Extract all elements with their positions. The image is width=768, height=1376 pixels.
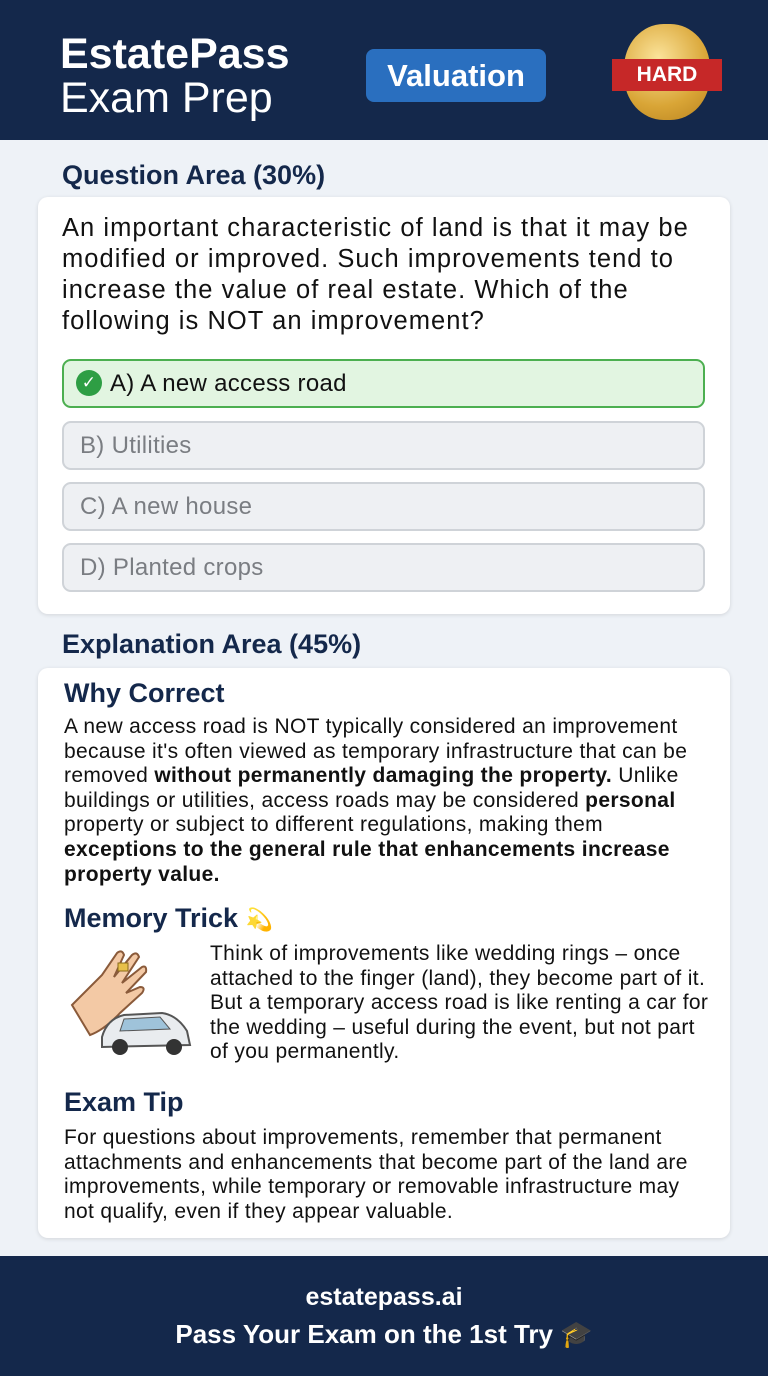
question card	[38, 197, 730, 614]
exam tip text: For questions about improvements, remember that permanent attachments and enhancements that become part of the land are improvements, while temporary or removable infrastructure may not qualify, even if they appear valuable.	[64, 1126, 688, 1223]
title: Exam Prep	[60, 74, 273, 122]
option D: D) Planted crops	[80, 554, 264, 581]
difficulty badge	[612, 24, 722, 120]
option D	[62, 543, 705, 592]
explanation heading: Explanation Area (45%)	[62, 629, 361, 659]
icon: hand and car	[70, 950, 192, 1055]
why correct heading: Why Correct	[64, 678, 225, 708]
option B: B) Utilities	[80, 432, 192, 459]
option A correct: A) A new access road	[110, 370, 347, 397]
option C	[62, 482, 705, 531]
memory trick heading: Memory Trick 💫	[64, 903, 273, 933]
header	[0, 0, 768, 140]
option A correct: ✓	[82, 373, 96, 392]
difficulty badge: HARD	[637, 63, 697, 86]
option C: C) A new house	[80, 493, 252, 520]
exam tip heading: Exam Tip	[64, 1087, 184, 1117]
footer	[0, 1256, 768, 1376]
footer tagline: Pass Your Exam on the 1st Try 🎓	[175, 1319, 593, 1349]
category badge	[366, 49, 546, 102]
option B	[62, 421, 705, 470]
why correct text: A new access road is NOT typically considered an improvement because it's often viewed as temporary infrastructure that can be removed without permanently damaging the property. Unlike buildings or utilities, access roads may be considered personal property or subject to different regulations, making them exceptions to the general rule that enhancements increase property value.	[64, 715, 687, 886]
title: EstatePass	[60, 30, 290, 78]
question heading: Question Area (30%)	[62, 160, 325, 190]
footer url: estatepass.ai	[305, 1283, 463, 1311]
title	[60, 30, 290, 122]
option A correct	[62, 359, 705, 408]
category badge: Valuation	[387, 58, 525, 93]
question text: An important characteristic of land is that it may be modified or improved. Such improvements tend to increase the value of real estate. Which of the following is NOT an improvement?	[62, 214, 689, 335]
memory trick text: Think of improvements like wedding rings – once attached to the finger (land), they become part of it. But a temporary access road is like renting a car for the wedding – useful during the event, but not part of you permanently.	[210, 942, 708, 1063]
explanation card	[38, 668, 730, 1238]
